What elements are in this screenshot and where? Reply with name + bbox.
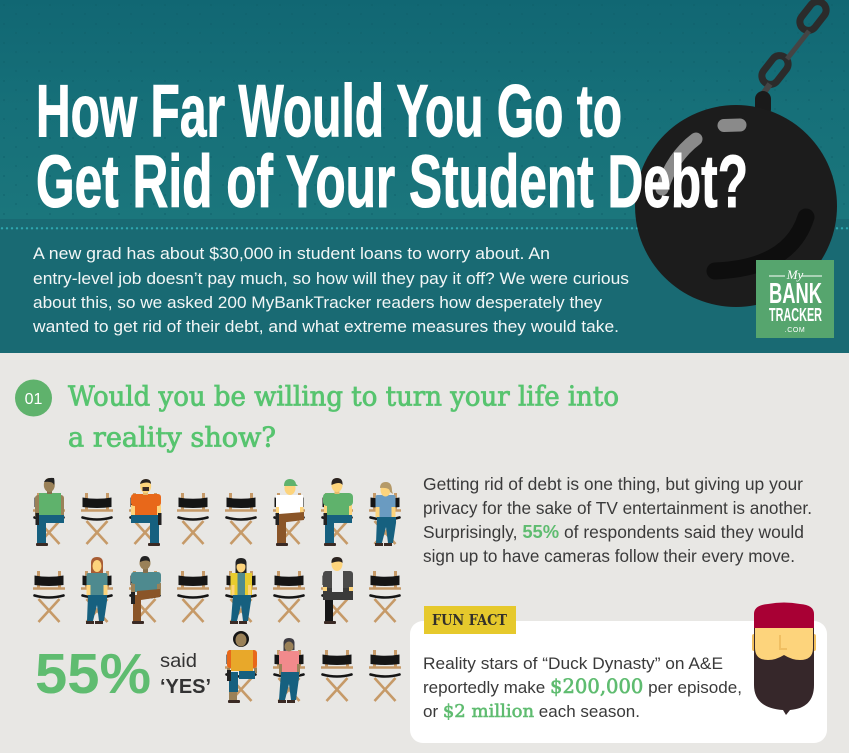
person in chair 18 (273, 638, 305, 703)
intro text (32, 244, 629, 336)
number badge 01: 01 (25, 391, 42, 408)
fun fact tag: FUN FACT (432, 611, 508, 629)
statistic: 55% said yes (35, 642, 211, 706)
logo: MyBankTracker: .COM (785, 327, 805, 334)
empty chair 5 (225, 493, 257, 544)
intro text: entry-level job doesn’t pay much, so how will they pay it off? We were curious (33, 269, 629, 288)
person in chair 13 (225, 558, 257, 624)
intro text: A new grad has about $30,000 in student loans to worry about. An (33, 244, 550, 263)
statistic: 55% said yes: ‘YES’ (160, 676, 211, 698)
person in chair 17 (225, 631, 257, 703)
fun fact text: reportedly make $200,000 per episode, (423, 675, 742, 698)
empty chair 4 (177, 493, 209, 544)
statistic: 55% said yes: said (160, 650, 197, 672)
header panel (0, 0, 849, 353)
icon: wrecking ball and chain (635, 0, 837, 307)
person in chair 11 (129, 556, 161, 624)
body paragraph: Getting rid of debt is one thing, but giving up your (423, 474, 803, 494)
icon: bearded man with red bandana (752, 602, 816, 715)
person in chair 8 (369, 482, 401, 546)
fun fact tag (424, 606, 516, 634)
section heading: Would you be willing to turn your life into (68, 380, 619, 412)
title (36, 70, 748, 223)
fun fact card (410, 621, 827, 743)
chart: 20 chair pictogram, 55% occupied (33, 478, 401, 703)
section heading: a reality show? (68, 422, 276, 454)
logo: MyBankTracker: My (786, 267, 804, 282)
section heading (68, 380, 619, 454)
empty chair 12 (177, 571, 209, 622)
empty chair 16 (369, 571, 401, 622)
fun fact text: Reality stars of “Duck Dynasty” on A&E (423, 654, 723, 673)
statistic: 55% said yes: 55% (35, 642, 151, 706)
empty chair 20 (369, 650, 401, 701)
number badge 01 (15, 380, 52, 416)
empty chair 19 (321, 650, 353, 701)
person in chair 3 (129, 479, 162, 546)
body paragraph: sign up to have cameras follow their every move. (423, 546, 795, 566)
body paragraph: Surprisingly, 55% of respondents said they would (423, 521, 804, 542)
fun fact text: or $2 million each season. (423, 701, 640, 722)
person in chair 7 (321, 478, 353, 546)
person in chair 1 (33, 478, 65, 546)
empty chair 14 (273, 571, 305, 622)
person in chair 10 (81, 557, 113, 624)
empty chair 9 (33, 571, 65, 622)
logo: MyBankTracker (756, 260, 834, 338)
intro text: about this, so we asked 200 MyBankTracker readers how desperately they (33, 293, 603, 312)
body paragraph (423, 474, 812, 566)
intro text: wanted to get rid of their debt, and what extreme measures they would take. (32, 317, 619, 336)
person in chair 15 (321, 557, 353, 624)
person in chair 6 (273, 479, 305, 546)
fun fact text (423, 654, 742, 722)
empty chair 2 (81, 493, 113, 544)
body paragraph: privacy for the sake of TV entertainment is another. (423, 498, 812, 518)
